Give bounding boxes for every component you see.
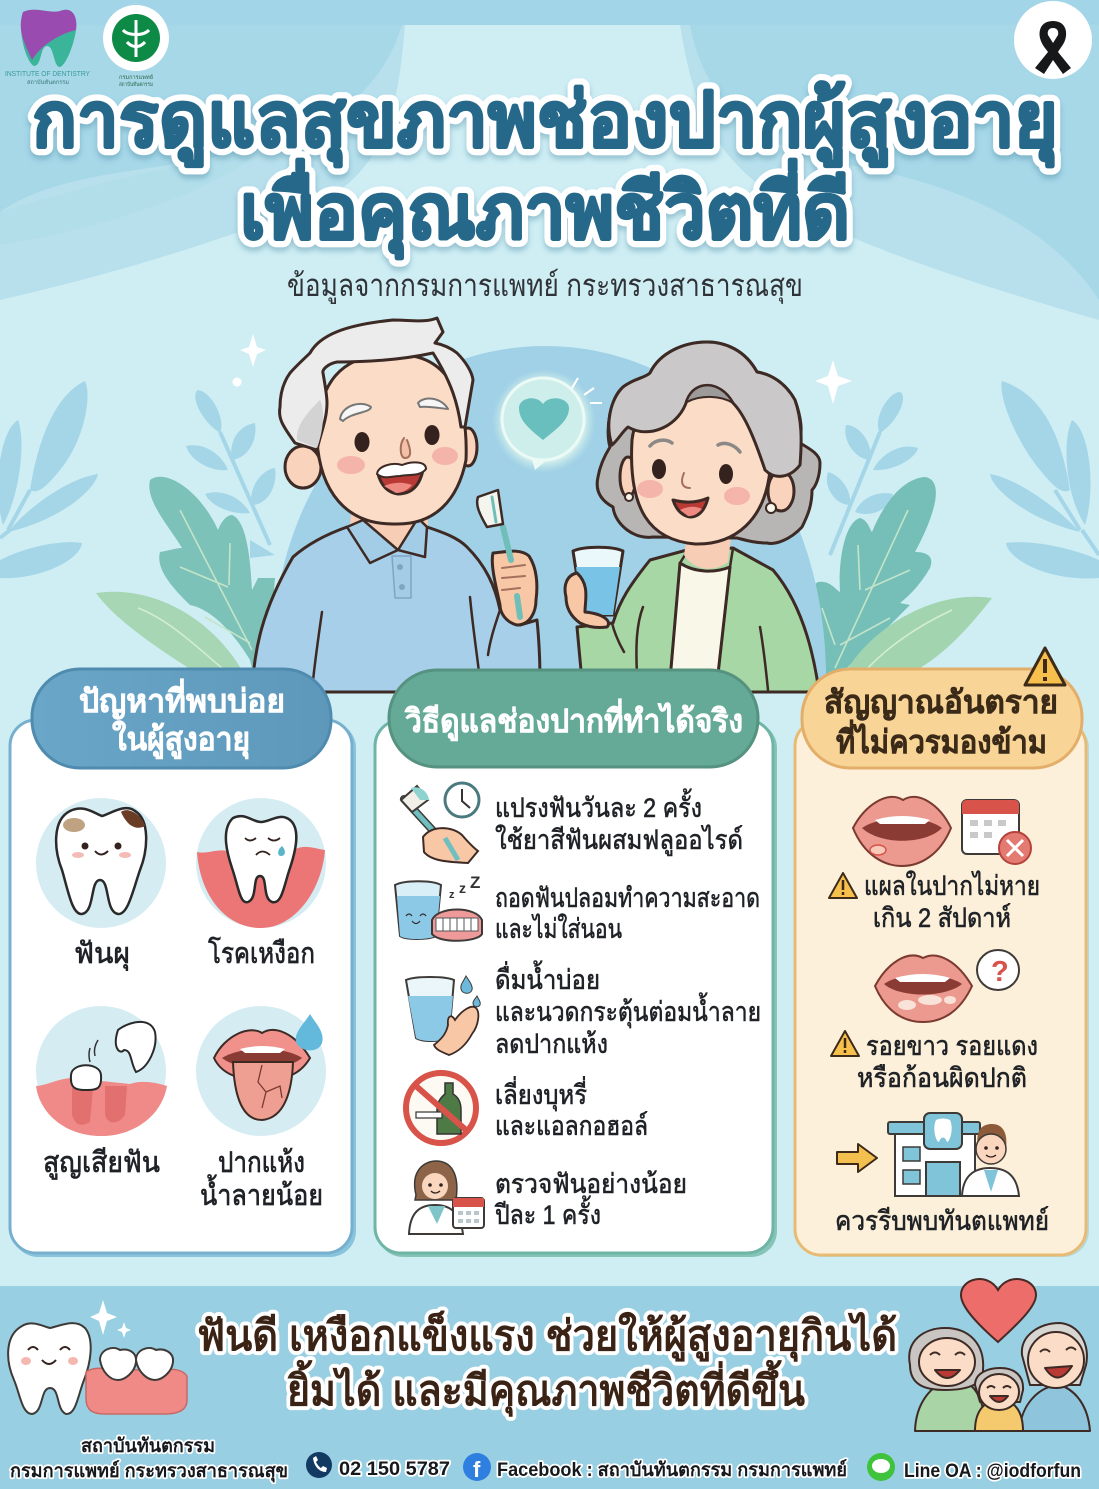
icon: happy tooth and gums [8,1300,187,1414]
illustration: elderly woman [565,342,820,692]
man nose [401,438,410,458]
footer message: ฟันดี เหงือกแข็งแรง ช่วยให้ผู้สูงอายุกินได้ [197,1310,897,1362]
text: drink water: ดื่มน้ำบ่อย [495,960,600,995]
text: avoid smoking [495,1076,648,1141]
icon: black mourning ribbon [1014,1,1092,79]
man shirt [252,527,540,692]
text: patches [857,1031,1038,1093]
heading: problems: ในผู้สูงอายุ [112,720,250,760]
title: เพื่อคุณภาพชีวิตที่ดี [240,158,850,260]
heading: oral care: วิธีดูแลช่องปากที่ทำได้จริง [404,698,743,742]
icon: denture in glass: Z [470,873,480,892]
icon: lips with sore [853,797,951,866]
man right ear [459,428,477,466]
text: patches: หรือก้อนผิดปกติ [857,1063,1027,1093]
title [32,78,1058,260]
icon: warning small 1 [829,873,857,898]
woman shirt [669,563,730,692]
man fingers [502,565,525,590]
text: sore: เกิน 2 สัปดาห์ [873,902,1011,933]
logo: ministry of public health: สถาบันทันตกรรม [119,81,153,88]
icon: warning small 2 [831,1031,859,1056]
man shirt lines [312,597,500,690]
toothbrush handle [503,527,520,617]
title: เพื่อคุณภาพชีวิตที่ดี [240,158,850,260]
woman neck [684,530,732,569]
icon: lips with patches [875,956,972,1022]
heading: problems: ปัญหาที่พบบ่อย [79,678,285,720]
icon: denture in glass [395,873,482,941]
icon: arrow [837,1144,877,1172]
logo: ministry of public health [103,5,169,88]
text: dental checkup [495,1169,687,1230]
woman cardigan [577,548,819,692]
man hair [280,318,473,450]
icon: tooth decay [36,798,166,928]
footer: line [867,1453,1081,1482]
heading: danger signs: ที่ไม่ควรมองข้าม [836,719,1047,760]
header pill: oral care [389,670,758,767]
header pill: danger signs [802,669,1082,768]
panel: common problems [10,669,356,1257]
text: denture: และไม่ใส่นอน [495,913,622,944]
footer: organisation: สถาบันทันตกรรม [81,1436,215,1457]
text: brushing: ใช้ยาสีฟันผสมฟลูออไรด์ [495,824,743,856]
icon: tooth loss [36,1006,167,1136]
woman nose [682,473,690,488]
illustration: background foliage right [807,381,1099,675]
text: dental checkup: ตรวจฟันอย่างน้อย [495,1169,687,1199]
woman face [632,395,770,544]
heading: problems [79,678,285,760]
footer: organisation: กรมการแพทย์ กระทรวงสาธารณสุข [10,1460,288,1483]
icon: dry mouth [196,1006,326,1136]
man tongue [384,483,412,493]
panel: danger signs [795,648,1089,1257]
icon: question bubble: ? [991,956,1009,988]
text: denture: ถอดฟันปลอมทำความสะอาด [495,883,760,913]
icon: denture in glass: z [449,889,455,901]
man mouth [378,470,423,494]
man mustache [377,462,426,477]
icon: heart speech bubble [492,369,602,473]
woman top hair [609,342,801,476]
woman earrings [625,493,776,513]
icon: warning triangle [1025,648,1065,685]
icon: clinic and dentist [888,1113,1019,1196]
logo: institute of dentistry: INSTITUTE OF DENTISTRY [5,69,90,78]
toothbrush bristle accent [492,497,496,522]
icon: water and hand [406,976,480,1055]
icon: dentist and calendar [409,1161,484,1234]
woman eyebrows [650,440,740,452]
label: tooth decay: ฟันผุ [74,938,130,971]
man face [317,355,466,524]
logo: institute of dentistry [5,10,90,86]
footer: organisation [10,1436,288,1483]
label: dry mouth [200,1147,323,1212]
glass water [576,567,620,615]
illustration: family [909,1323,1090,1431]
label: tooth loss: สูญเสียฟัน [43,1147,160,1180]
text: dental checkup: ปีละ 1 ครั้ง [495,1195,601,1230]
illustration: elderly man [252,318,540,692]
man eyes [354,425,440,452]
text: avoid smoking: และแอลกอฮอล์ [495,1110,648,1141]
label: dry mouth: ปากแห้ง [218,1147,305,1179]
icon: question bubble [977,950,1019,990]
text: drink water: และนวดกระตุ้นต่อมน้ำลาย [495,992,761,1029]
icon: gum disease [196,798,326,928]
text: brushing [495,788,743,856]
man hand [492,551,537,625]
title: การดูแลสุขภาพช่องปากผู้สูงอายุ [32,78,1058,168]
heading: danger signs [824,684,1058,760]
man neck [350,505,428,550]
icon: no smoking no alcohol [406,1073,476,1143]
footer: phone: 02 150 5787 [339,1459,450,1480]
footer: facebook: f [473,1457,481,1482]
woman eyes [652,459,733,484]
woman ears [620,457,794,511]
woman swirl [687,385,733,403]
woman cheeks [637,480,750,505]
icon: sparkles [232,334,852,404]
text: see dentist: ควรรีบพบทันตแพทย์ [835,1205,1049,1236]
man cheeks [337,447,458,474]
woman hand [565,573,609,628]
man placket [392,556,411,598]
woman cardigan lines [612,548,768,692]
footer band [0,1286,1099,1489]
text: drink water: ลดปากแห้ง [495,1029,608,1059]
icon: denture in glass: z [459,880,466,896]
man hair shading [297,400,323,448]
woman tongue [680,507,702,516]
icon: calendar with cross [962,800,1031,864]
header pill: problems [32,669,331,768]
subtitle: ข้อมูลจากกรมการแพทย์ กระทรวงสาธารณสุข [287,268,803,305]
title: การดูแลสุขภาพช่องปากผู้สูงอายุ [32,78,1058,168]
woman back hair [597,342,820,543]
man ears [285,446,321,488]
label: dry mouth: น้ำลายน้อย [200,1174,323,1212]
text: denture [495,883,760,944]
label: gum disease: โรคเหงือก [208,936,315,970]
man collar [347,518,427,563]
footer: facebook [463,1453,847,1482]
footer: phone [306,1452,450,1480]
text: patches: รอยขาว รอยแดง [866,1031,1038,1061]
illustration: heart [961,1279,1036,1342]
water glass [573,547,623,615]
footer: line: Line OA : @iodforfun [904,1461,1081,1482]
text: brushing: แปรงฟันวันละ 2 ครั้ง [495,788,702,823]
footer: facebook: Facebook : สถาบันทันตกรรม กรมการแพทย์ [497,1459,847,1481]
icon: toothbrush and clock [401,783,479,863]
panel: oral care [375,670,777,1257]
text: drink water [495,960,761,1059]
text: sore: แผลในปากไม่หาย [864,870,1040,901]
man eyebrows [340,398,448,421]
illustration: background foliage left [0,381,276,680]
illustration: blue circle behind couple [271,346,826,690]
footer message: ยิ้มได้ และมีคุณภาพชีวิตที่ดีขึ้น [287,1359,805,1417]
text: sore [864,870,1040,933]
woman mouth [673,498,708,517]
logo: ministry of public health: กรมการแพทย์ [119,74,153,81]
heading: danger signs: สัญญาณอันตราย [824,684,1058,721]
text: avoid smoking: เลี่ยงบุหรี่ [495,1076,587,1112]
footer message [197,1310,897,1417]
logo: institute of dentistry: สถาบันทันตกรรม [27,79,69,86]
toothbrush head [477,490,503,527]
